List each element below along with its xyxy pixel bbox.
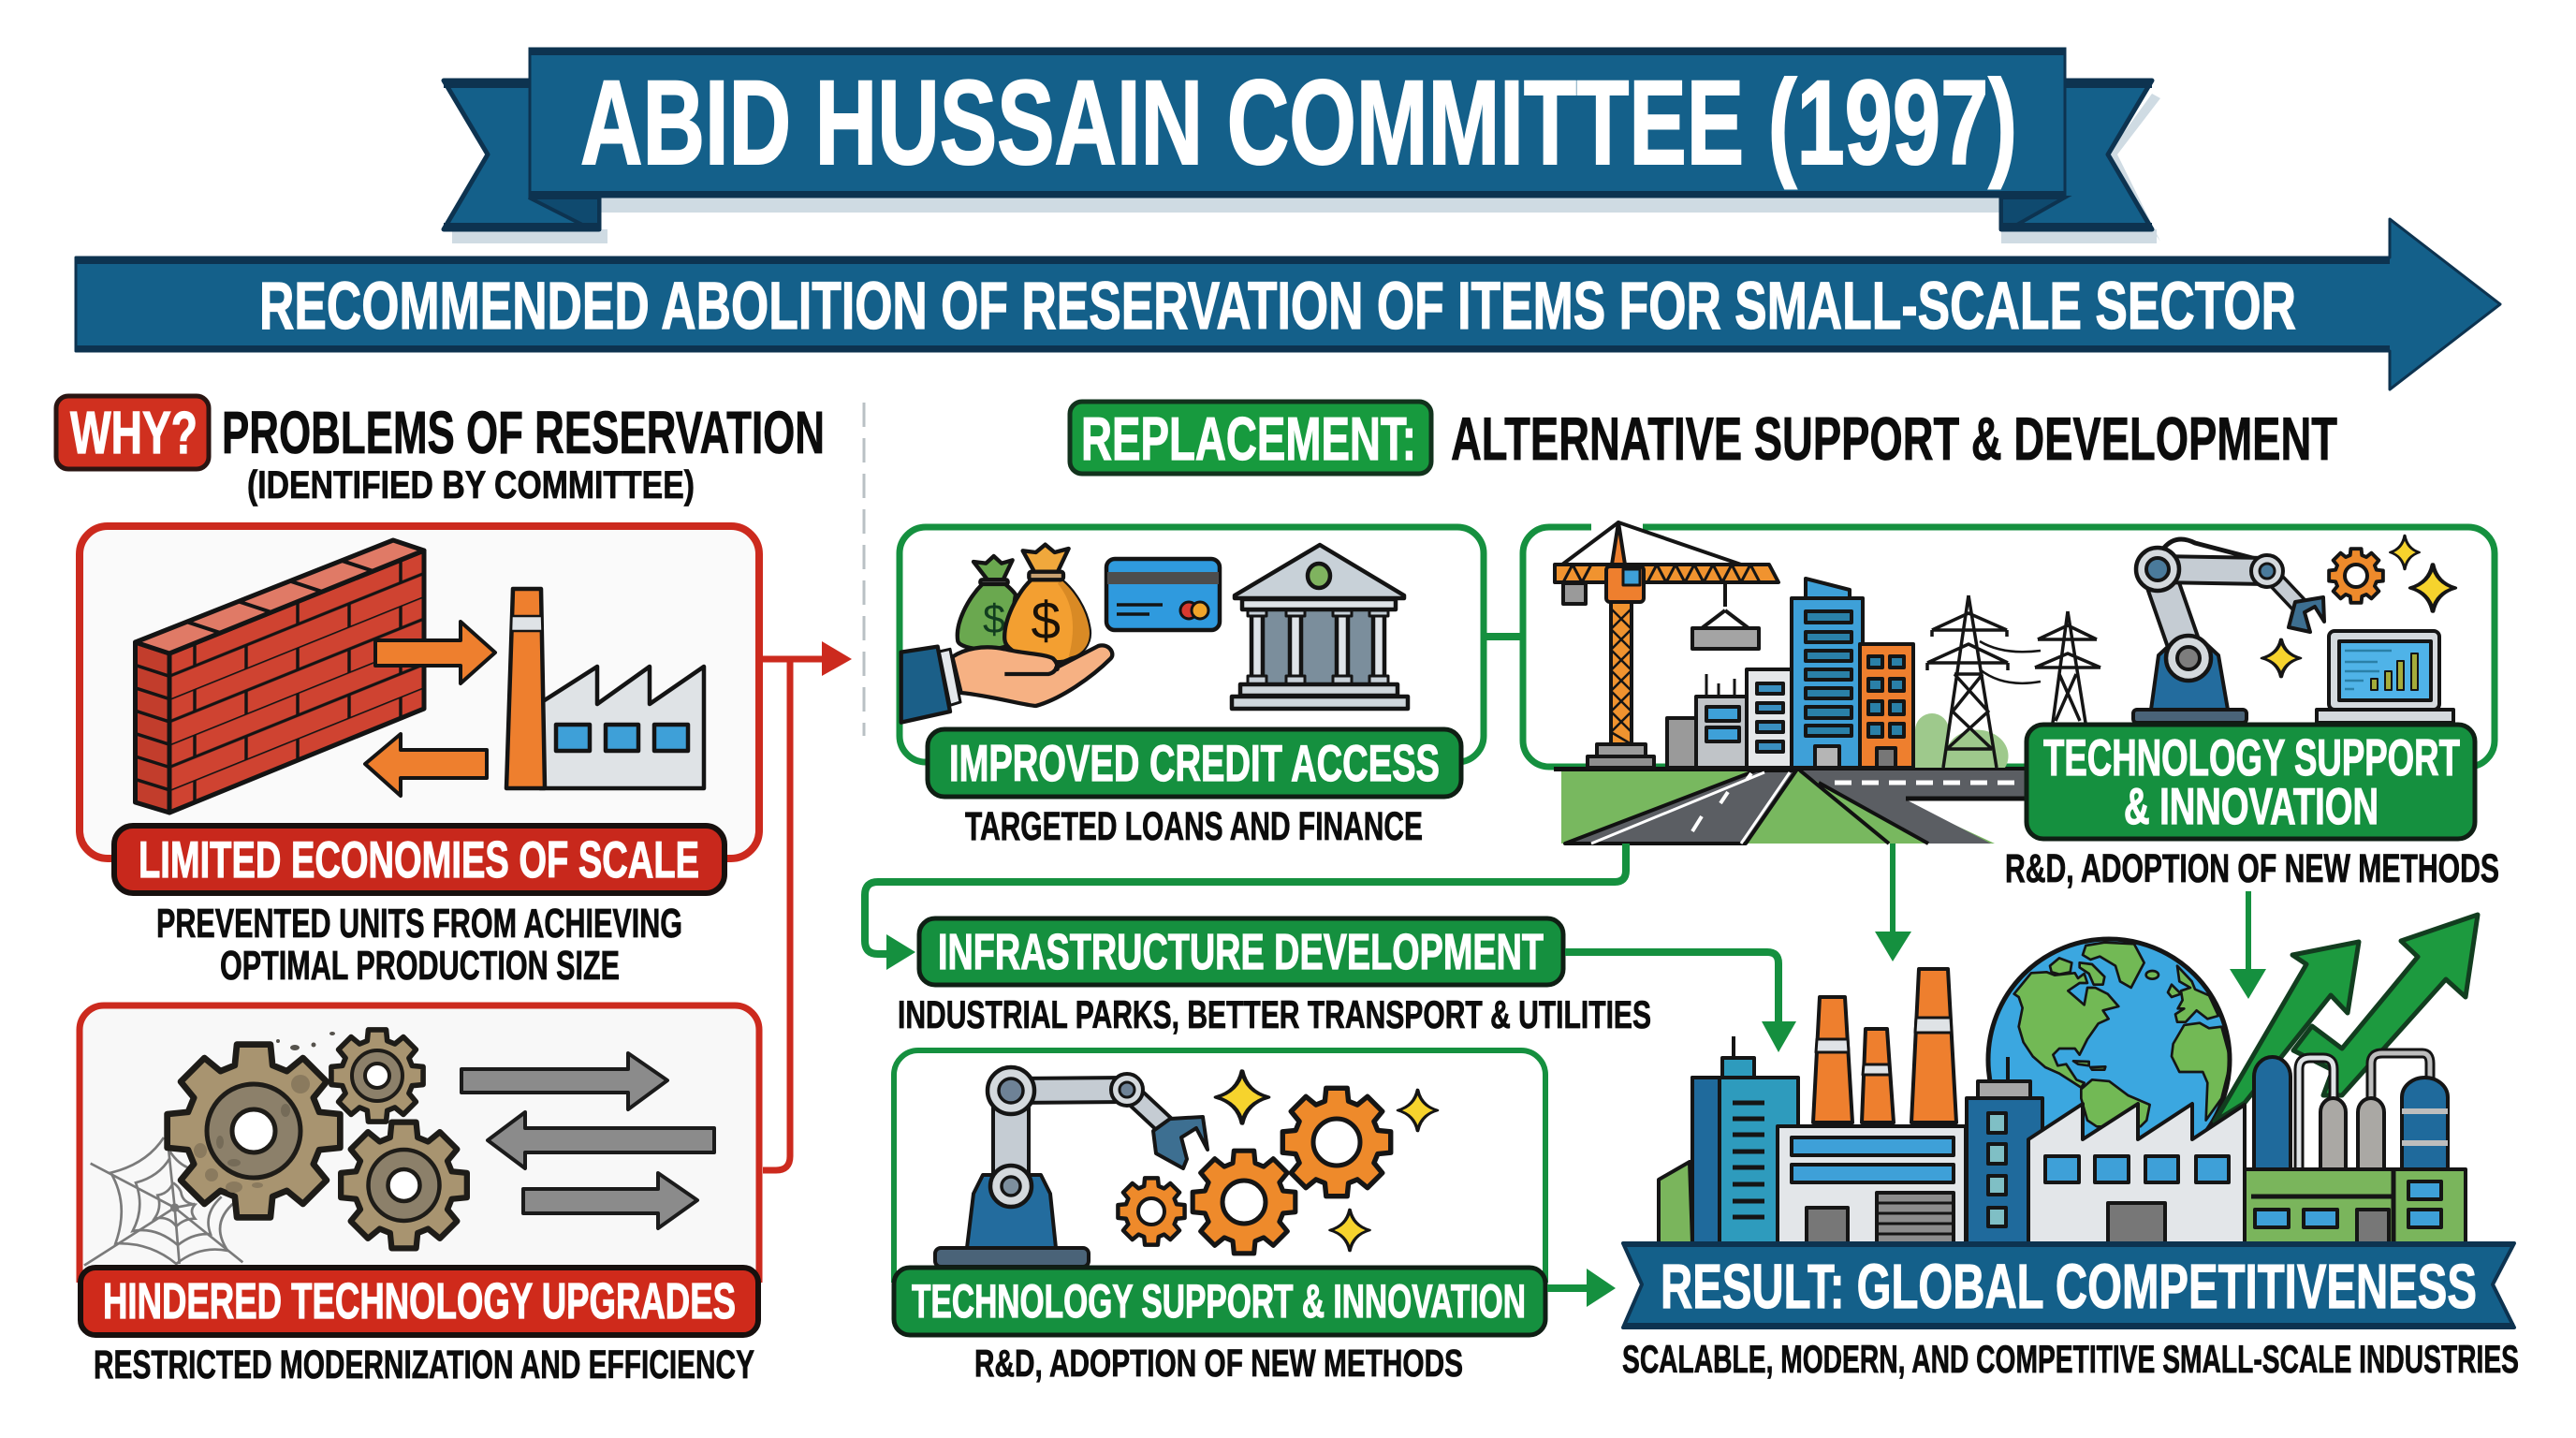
- label: technology support and innovation: [894, 1268, 1545, 1335]
- arrow: scene down to result: [1875, 844, 1911, 961]
- icon: growth arrows: [2215, 915, 2478, 1122]
- label: technology support and innovation: [2027, 725, 2475, 839]
- arrow: infrastructure to result: [1565, 952, 1796, 1052]
- panel: limited economies of scale: [80, 526, 759, 989]
- icon: blue tower: [1967, 1057, 2042, 1243]
- label: technology support and innovation: & INNOVATION: [2124, 777, 2378, 835]
- label: improved credit access: IMPROVED CREDIT ACCESS: [949, 734, 1440, 792]
- arrow: gray right top: [461, 1053, 667, 1109]
- icon: money bags and hand: $: [1032, 593, 1061, 652]
- icon: refinery: [2245, 1053, 2466, 1243]
- icon: sparkles: [1216, 1071, 1438, 1251]
- icon: bank building: [1232, 545, 1408, 709]
- arrow: orange left: [365, 734, 487, 796]
- icon: cobweb: [84, 1137, 242, 1266]
- icon: green side building: [1659, 1162, 1692, 1243]
- icon: brick wall: [135, 540, 424, 813]
- label: improved credit access: [928, 729, 1461, 797]
- panel: technology support and innovation: [894, 1050, 1545, 1385]
- description text: PREVENTED UNITS FROM ACHIEVING: [156, 901, 682, 946]
- description text: RESTRICTED MODERNIZATION AND EFFICIENCY: [94, 1343, 754, 1387]
- icon: sawtooth factory: [2028, 1104, 2245, 1243]
- panel: infrastructure and technology scene: [1523, 520, 2499, 891]
- heading: why problems of reservation: [56, 396, 825, 506]
- arrow: gray right bottom: [523, 1173, 697, 1228]
- illustration: global industry skyline: [1659, 915, 2478, 1243]
- icon: rust debris: [276, 1032, 335, 1050]
- description text: [156, 901, 682, 989]
- icon: pylons: [1927, 595, 2100, 768]
- description text: TARGETED LOANS AND FINANCE: [965, 804, 1423, 849]
- arrow: technology panel to result: [1547, 1269, 1616, 1307]
- icon: chimneys: [1813, 969, 1956, 1123]
- connector: credit to infrastructure scene: [1486, 633, 1521, 640]
- panel: improved credit access: [900, 527, 1484, 849]
- label: hindered technology upgrades: [80, 1268, 758, 1335]
- icon: tower crane: [1555, 522, 1778, 768]
- icon: globe: [1986, 936, 2232, 1137]
- label: limited economies of scale: [114, 826, 724, 893]
- icon: rusty small gear: [331, 1030, 423, 1122]
- result banner: [1623, 1241, 2514, 1328]
- icon: orange gears: [1118, 1088, 1391, 1254]
- arrow: problems to replacement: [763, 641, 852, 1170]
- icon: credit card: [1106, 559, 1220, 630]
- arrow: scene to infrastructure development: [865, 844, 1626, 970]
- heading: why problems of reservation: PROBLEMS OF RESERVATION: [222, 399, 825, 466]
- label: hindered technology upgrades: HINDERED TECHNOLOGY UPGRADES: [103, 1273, 736, 1329]
- title banner: [444, 48, 2160, 243]
- heading: why problems of reservation: (IDENTIFIED BY COMMITTEE): [247, 462, 695, 506]
- label: infrastructure development: [919, 918, 1563, 985]
- description text: OPTIMAL PRODUCTION SIZE: [220, 943, 620, 989]
- icon: robotic arm: [935, 1067, 1208, 1267]
- heading: why problems of reservation: WHY?: [70, 399, 198, 466]
- arrow: technology down to result: [2230, 891, 2266, 999]
- description text: INDUSTRIAL PARKS, BETTER TRANSPORT & UTILITIES: [898, 992, 1651, 1036]
- arrow: gray left: [488, 1112, 714, 1168]
- heading: replacement alternative support: REPLACEMENT:: [1081, 404, 1416, 473]
- title text: ABID HUSSAIN COMMITTEE (1997): [580, 56, 2017, 190]
- icon: trees: [1915, 713, 2009, 768]
- icon: small orange gear: [2329, 549, 2383, 603]
- icon: main factory: [1778, 1126, 1966, 1243]
- heading: replacement alternative support: [1070, 402, 2337, 474]
- icon: laptop with chart: [2317, 631, 2453, 723]
- arrow: orange right: [375, 622, 495, 683]
- icon: money bags and hand: $: [983, 597, 1005, 642]
- label: limited economies of scale: LIMITED ECONOMIES OF SCALE: [139, 830, 699, 888]
- label: infrastructure development: INFRASTRUCTURE DEVELOPMENT: [938, 924, 1544, 980]
- icon: rusty large gear: [168, 1045, 340, 1217]
- icon: robotic arm: [2133, 539, 2324, 723]
- recommendation arrow banner: [76, 219, 2500, 389]
- icon: city buildings: [1667, 579, 1913, 768]
- icon: ground and roads: [1554, 767, 2031, 844]
- icon: rusty medium gear: [341, 1123, 467, 1248]
- icon: sparkles: [2262, 536, 2455, 677]
- icon: blue office building: [1692, 1036, 1798, 1243]
- icon: money bags and hand: [901, 545, 1112, 723]
- panel: hindered technology upgrades: [80, 1005, 759, 1387]
- label: technology support and innovation: TECHNOLOGY SUPPORT & INNOVATION: [912, 1275, 1526, 1328]
- icon: factory: [506, 589, 704, 788]
- description text: R&D, ADOPTION OF NEW METHODS: [974, 1342, 1463, 1385]
